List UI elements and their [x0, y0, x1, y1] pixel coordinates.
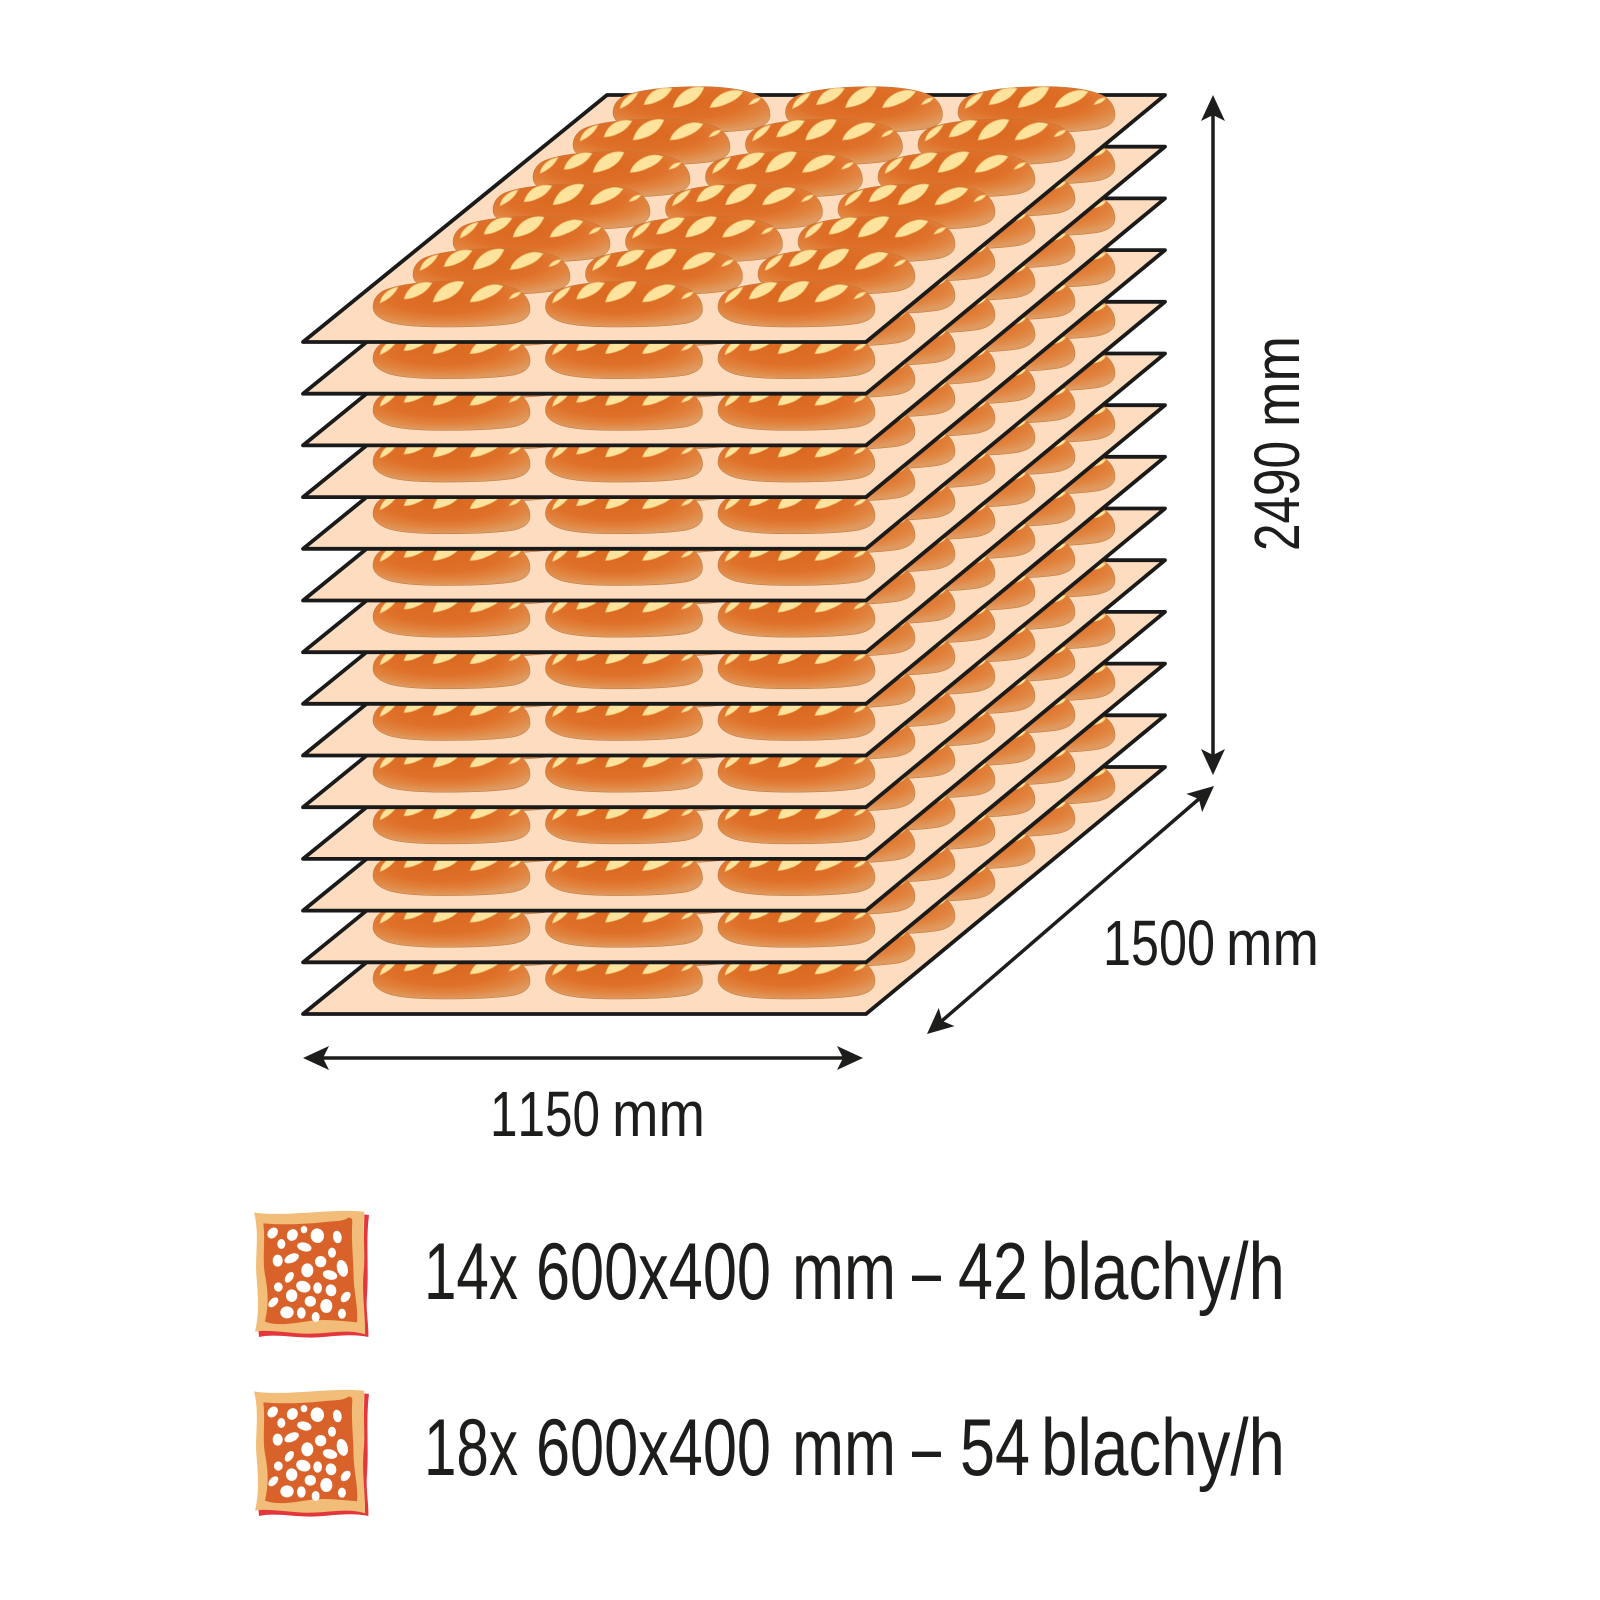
tray 8 [303, 448, 1165, 704]
capacity line 1: 14x [424, 1227, 518, 1317]
label: height [1241, 336, 1313, 551]
tray 1 (top) [303, 87, 1165, 342]
label: width: mm [612, 1078, 705, 1150]
capacity line 2: blachy/h [1041, 1403, 1285, 1493]
arrow: depth dimension [927, 786, 1214, 1034]
label: height: 2490 [1241, 441, 1313, 551]
capacity line 1 [424, 1227, 1285, 1317]
label: height: mm [1241, 336, 1313, 427]
capacity line 2: – [912, 1403, 942, 1493]
label: depth: mm [1226, 907, 1319, 979]
capacity line 1: blachy/h [1041, 1227, 1285, 1317]
tray 5 [303, 293, 1165, 549]
arrow: height dimension [1201, 95, 1225, 775]
tray 14 (bottom) [303, 759, 1165, 1014]
label: width: 1150 [490, 1078, 600, 1150]
capacity line 1: – [912, 1227, 942, 1317]
stack of 14 baking trays with bread loaves [303, 87, 1165, 1014]
tray 2 [303, 138, 1165, 394]
capacity line 1: 42 [958, 1227, 1028, 1317]
icon: tray of focaccia 1 [254, 1211, 369, 1338]
capacity line 1: 600x400 [536, 1227, 771, 1317]
capacity line 2: 54 [960, 1403, 1030, 1493]
capacity line 2: mm [792, 1403, 896, 1493]
label: depth: 1500 [1103, 907, 1215, 979]
capacity line 2: 600x400 [536, 1403, 771, 1493]
icon: tray of focaccia 2 [254, 1390, 369, 1517]
capacity line 1: mm [792, 1227, 896, 1317]
tray 7 [303, 397, 1165, 652]
tray 11 [303, 604, 1165, 859]
tray 4 [303, 242, 1165, 497]
arrow: width dimension [303, 1046, 863, 1070]
label: depth [1103, 907, 1319, 979]
capacity line 2: 18x [424, 1403, 518, 1493]
tray 10 [303, 552, 1165, 807]
capacity line 2 [424, 1403, 1285, 1493]
tray 13 [303, 707, 1165, 962]
tray 9 [303, 500, 1165, 756]
tray 3 [303, 190, 1165, 445]
tray 12 [303, 655, 1165, 911]
label: width [490, 1078, 705, 1150]
tray 6 [303, 345, 1165, 600]
